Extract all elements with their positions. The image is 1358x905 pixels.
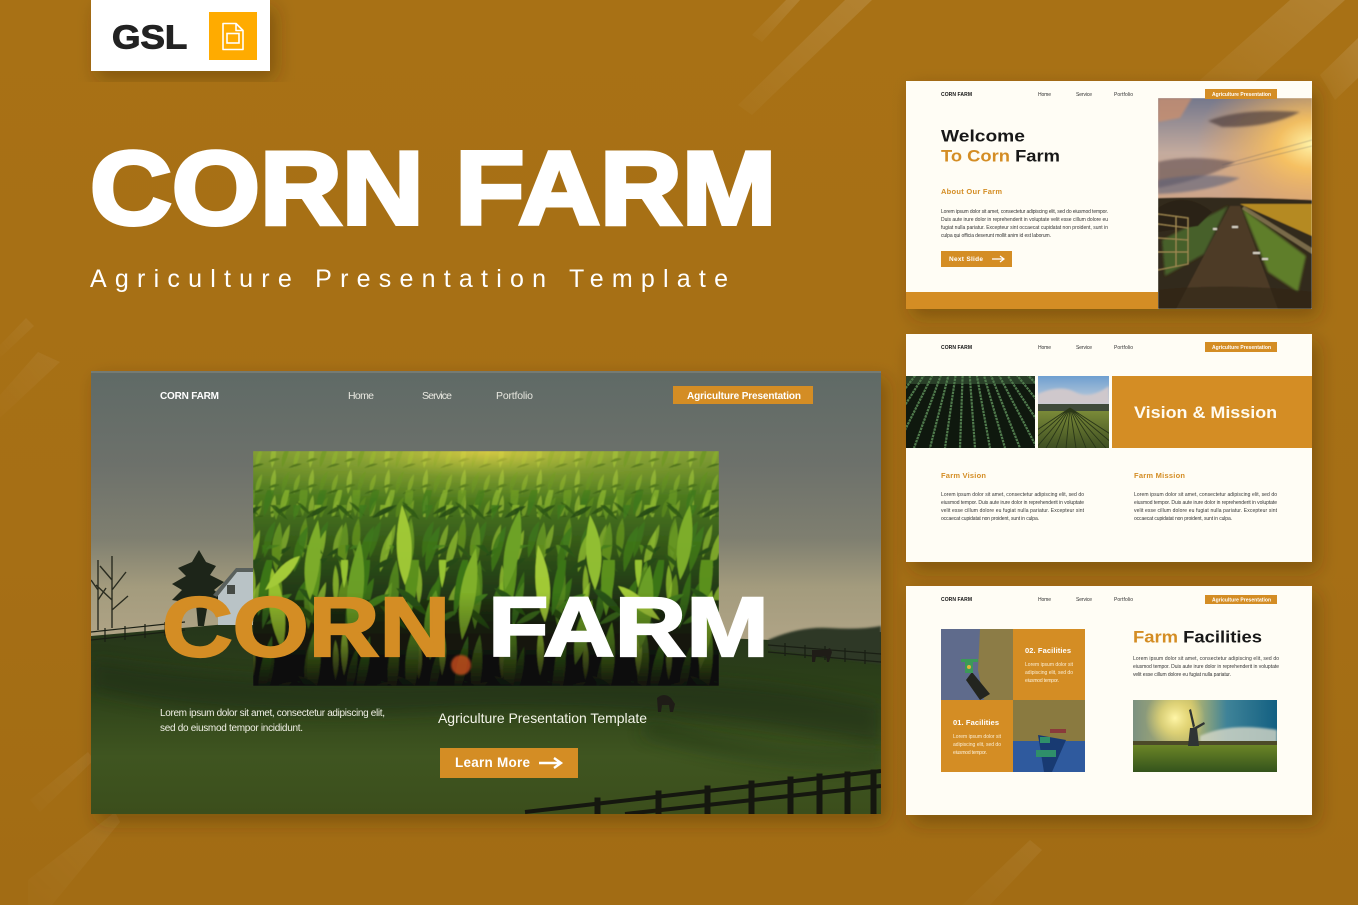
column: Farm Vision: eiusmod tempor. Duis aute irure dolor in reprehenderit in voluptate [941, 500, 1084, 506]
card: 02. Facilities: 02. Facilities [1025, 646, 1071, 655]
house [213, 568, 253, 625]
photo: crop rows aerial [906, 376, 1035, 448]
column: Farm Vision: occaecat cupidatat non proident, sunt in culpa. [941, 516, 1039, 522]
button: Next Slide [941, 251, 1012, 267]
body text: Lorem ipsum dolor sit amet, consectetur adipiscing elit, sed do eiusmod tempor. [941, 209, 1108, 215]
tag: Agriculture Presentation [1212, 92, 1271, 98]
card: 01. Facilities: adipiscing elit, sed do [953, 742, 1001, 748]
card: 01. Facilities [941, 700, 1013, 772]
body text [941, 209, 1108, 239]
card: 01. Facilities: eiusmod tempor. [953, 750, 987, 756]
tag: Agriculture Presentation: Agriculture Presentation [687, 391, 801, 402]
tag [1205, 342, 1277, 352]
word: FARM: FARM [488, 581, 769, 674]
navigation: Service [1076, 92, 1092, 98]
card: 01. Facilities: Lorem ipsum dolor sit [953, 734, 1002, 740]
fence right [768, 643, 881, 664]
button: Learn More [440, 748, 578, 778]
navigation: Portfolio [1114, 92, 1133, 98]
navigation: Home [1038, 92, 1051, 98]
body text: culpa qui officia deserunt mollit anim id est laborum. [941, 233, 1051, 239]
icon: slides document [209, 12, 257, 60]
column: Farm Vision: velit esse cillum dolore eu fugiat nulla pariatur. Excepteur sint [941, 508, 1085, 514]
photo: harvester aerial 1 [941, 629, 1013, 700]
windmill [1188, 709, 1205, 746]
navigation: Service [422, 390, 452, 402]
text: lorem description: Lorem ipsum dolor sit amet, consectetur adipiscing elit, [160, 708, 385, 719]
body text: fugiat nulla pariatur. Excepteur sint occaecat cupidatat non proident, sunt in [941, 225, 1108, 231]
column: Farm Vision [941, 471, 1085, 522]
navigation: Home [348, 390, 374, 402]
navigation: CORN FARM [941, 345, 972, 351]
column: Farm Mission: eiusmod tempor. Duis aute irure dolor in reprehenderit in voluptate [1134, 500, 1277, 506]
word: CORN: CORN [162, 580, 450, 674]
navigation [941, 595, 1277, 604]
title: CORN FARM [90, 131, 776, 247]
tag [1205, 89, 1277, 99]
fence foreground [525, 770, 881, 814]
panel: farm facilities slide [906, 586, 1312, 815]
body text [1133, 656, 1279, 678]
body text: eiusmod tempor. Duis aute irure dolor in reprehenderit in voluptate [1133, 664, 1279, 670]
card: 01. Facilities: 01. Facilities [953, 718, 999, 727]
text: template label: Agriculture Presentation Template [438, 710, 647, 726]
tree: pine [172, 550, 226, 626]
column: Farm Mission: Farm Mission [1134, 471, 1185, 480]
fence left [91, 622, 185, 642]
button: Learn More: Learn More [455, 755, 530, 770]
navigation: Service [1076, 345, 1092, 351]
heading: CORN FARM [162, 580, 769, 674]
column: Farm Mission: Lorem ipsum dolor sit amet, consectetur adipiscing elit, sed do [1134, 492, 1277, 498]
navigation [160, 386, 813, 404]
panel: welcome slide [906, 81, 1312, 309]
icon: arrow [539, 758, 561, 768]
footer band [906, 292, 1158, 309]
column: Farm Vision: Farm Vision [941, 471, 986, 480]
heading: welcome: Welcome [941, 127, 1025, 145]
photo: farm at dusk background [91, 371, 881, 814]
navigation [941, 89, 1277, 99]
heading: Farm Facilities: Farm Facilities [1133, 627, 1262, 646]
subheading: About Our Farm [941, 187, 1002, 196]
navigation: Portfolio [496, 390, 533, 402]
button: Next Slide: Next Slide [949, 256, 983, 263]
lens flare [451, 655, 471, 675]
card: 02. Facilities [1013, 629, 1085, 700]
photo: field and clouds [1038, 376, 1109, 448]
panel: main slide [91, 371, 881, 814]
banner: Vision & Mission [1112, 376, 1312, 448]
card: 02. Facilities: eiusmod tempor. [1025, 678, 1059, 684]
tag: Agriculture Presentation [673, 386, 813, 404]
badge label: GSL [112, 19, 187, 56]
navigation: Portfolio [1114, 597, 1133, 603]
column: Farm Mission: velit esse cillum dolore eu fugiat nulla pariatur. Excepteur sint [1134, 508, 1278, 514]
corn leaves detail [265, 505, 714, 670]
navigation: CORN FARM [941, 92, 972, 98]
tag [1205, 595, 1277, 604]
column: Farm Vision: Lorem ipsum dolor sit amet, consectetur adipiscing elit, sed do [941, 492, 1084, 498]
icon: arrow [992, 256, 1004, 262]
body text: Lorem ipsum dolor sit amet, consectetur adipiscing elit, sed do [1133, 656, 1279, 662]
tree: bare left [91, 556, 128, 630]
badge: GSL Google Slides [91, 0, 270, 71]
card: 02. Facilities: Lorem ipsum dolor sit [1025, 662, 1074, 668]
navigation: Home [1038, 345, 1051, 351]
banner: Vision & Mission: Vision & Mission [1134, 402, 1277, 422]
navigation [941, 342, 1277, 352]
horses [657, 648, 832, 712]
photo: corn field [253, 451, 719, 686]
body text: Duis aute irure dolor in reprehenderit in voluptate velit esse cillum dolore eu [941, 217, 1108, 223]
text: lorem description: sed do eiusmod tempor incididunt. [160, 723, 303, 734]
text: lorem description [160, 708, 385, 734]
tag: Agriculture Presentation [1212, 345, 1271, 351]
subtitle: Agriculture Presentation Template [90, 265, 728, 293]
heading: welcome [941, 127, 1060, 165]
navigation: CORN FARM [160, 391, 219, 402]
photo: windmill [1133, 700, 1277, 772]
body text: velit esse cillum dolore eu fugiat nulla pariatur. [1133, 672, 1231, 678]
column: Farm Mission: occaecat cupidatat non proident, sunt in culpa. [1134, 516, 1232, 522]
navigation: Home [1038, 597, 1051, 603]
photo: sunset farm road [1158, 98, 1312, 309]
navigation: Service [1076, 597, 1092, 603]
photo: harvester aerial 2 [1013, 700, 1085, 772]
card: 02. Facilities: adipiscing elit, sed do [1025, 670, 1073, 676]
tag: Agriculture Presentation [1212, 598, 1271, 604]
column: Farm Mission [1134, 471, 1278, 522]
navigation: Portfolio [1114, 345, 1133, 351]
heading: welcome: To Corn Farm [941, 146, 1060, 165]
navigation: CORN FARM [941, 597, 972, 603]
panel: vision and mission slide [905, 334, 1325, 577]
